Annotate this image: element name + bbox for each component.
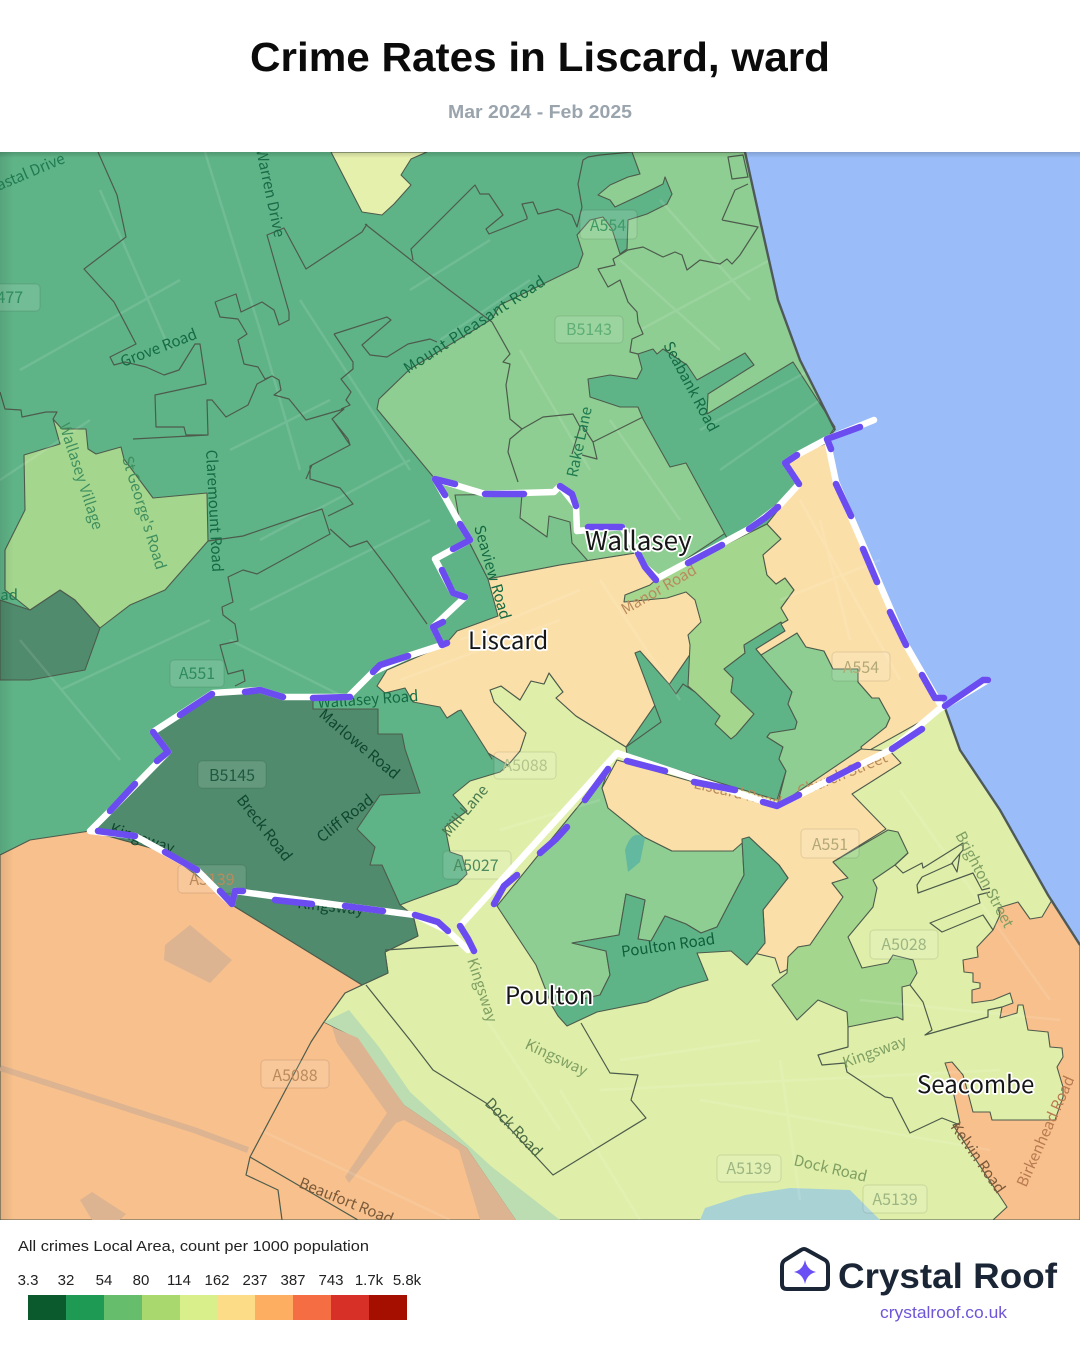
legend values: 387 [280,1272,306,1289]
road labels and shields: A5028 [881,931,927,955]
road labels and shields: Seabank Road [659,337,724,435]
road labels and shields: Wallasey Village [54,420,109,532]
ward boundary: white base line [90,420,988,950]
road labels and shields: A5088 [272,1062,318,1086]
legend values [18,1272,422,1289]
road labels and shields: Birkenhead Road [1011,1072,1079,1190]
legend values: 743 [318,1272,344,1289]
road labels and shields: A554 [843,654,879,678]
legend values: 114 [167,1272,191,1289]
road labels and shields: Kingsway [462,955,503,1025]
road labels and shields: St George's Road [117,453,172,572]
road labels and shields: A5139 [189,866,235,890]
place labels: Wallasey [585,521,692,558]
place labels: Poulton [505,976,593,1011]
river strip [700,1188,880,1220]
legend title: All crimes Local Area, count per 1000 population [18,1238,369,1255]
road labels and shields: A5088 [502,752,548,776]
logo: Crystal Roof [782,1249,1057,1322]
road labels and shields: A5139 [726,1155,772,1179]
legend values: 5.8k [393,1272,422,1289]
road labels and shields: Breck Road [232,790,297,865]
street network [0,152,1060,1220]
lake [625,835,645,872]
road labels and shields: A551 [812,831,848,855]
road labels and shields: A551 [179,660,215,684]
road labels and shields: Kingsway [107,818,177,858]
road labels and shields: Brighton Street [951,827,1019,932]
docks [332,1027,516,1220]
road labels and shields: Wallasey Road [317,685,419,713]
coast line [745,152,1080,945]
road labels and shields: Kingsway [522,1033,591,1081]
place labels: Seacombe [917,1065,1034,1100]
road labels and shields: Mount Pleasant Road [399,271,549,378]
tidal strip [324,1010,560,1220]
road labels and shields: Marlowe Road [315,704,404,784]
land-use blocks [0,925,248,1220]
road labels and shields: Kingsway [840,1030,909,1073]
road labels and shields: Liscard Road [692,772,784,813]
legend values: 162 [204,1272,230,1289]
subtitle: date range: Mar 2024 - Feb 2025 [448,102,632,122]
place labels [468,521,1034,1100]
legend colour scale [28,1295,407,1320]
legend values: 54 [96,1272,112,1289]
region: crime areas [0,152,1080,1220]
website: crystalroof.co.uk [880,1303,1008,1322]
road labels and shields: A5027 [453,852,499,876]
road labels and shields: Mill Lane [437,780,493,841]
legend values: 237 [242,1272,268,1289]
icon: house with star [782,1249,828,1289]
sea [745,152,1080,945]
road labels and shields: Rake Lane [561,405,597,479]
road labels and shields: Seaview Road [469,523,516,622]
place labels: Liscard [468,621,548,656]
shadow along map edges [0,152,1080,1220]
ward and area boundaries [0,152,758,686]
road labels and shields: Dock Road [480,1093,547,1161]
road labels and shields: B5145 [209,762,255,786]
road labels and shields: Claremount Road [201,449,228,573]
road labels and shields: Dock Road [792,1149,869,1187]
road labels and shields: Grove Road [117,323,200,372]
road labels and shields: Cliff Road [312,789,378,847]
legend values: 80 [133,1272,149,1289]
legend values: 32 [58,1272,74,1289]
road labels and shields: Poulton Road [620,928,716,962]
road labels and shields: Manor Road [617,559,700,619]
road labels and shields: A554 [590,212,626,236]
road labels and shields: Beaufort Road [296,1172,397,1229]
title: Crime Rates in Liscard, ward [250,34,830,80]
legend values: 3.3 [18,1272,38,1289]
road labels and shields: Kelvin Road [946,1118,1010,1197]
legend values: 1.7k [355,1272,384,1289]
road labels and shields: Kingsway [296,892,365,920]
road labels and shields: A5139 [872,1186,918,1210]
wordmark: Crystal Roof [838,1257,1057,1296]
ward boundary: purple dashes [98,427,988,951]
road labels and shields: Church Street [794,746,891,802]
road labels and shields: Warren Drive [251,147,290,239]
road labels and shields: B5143 [566,316,612,340]
legend [18,1238,422,1320]
